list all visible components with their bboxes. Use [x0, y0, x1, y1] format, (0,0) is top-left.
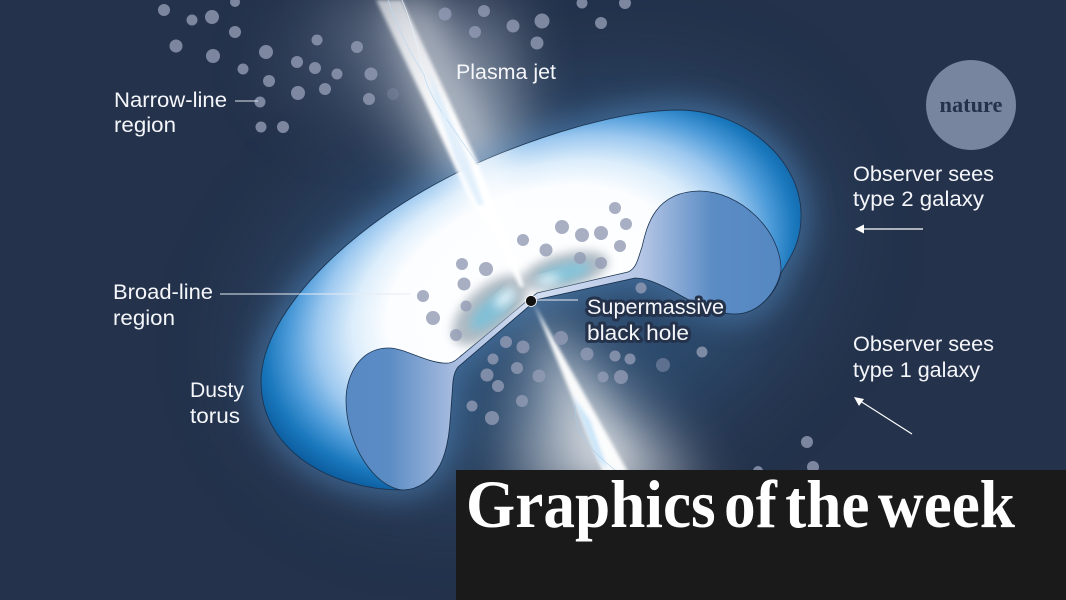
plasma jet: upper beam	[376, 0, 524, 287]
label: supermassive black hole: black hole	[587, 322, 689, 345]
label: observer sees type 1 galaxy: Observer sees	[853, 333, 994, 356]
label: observer sees type 2 galaxy: type 2 galaxy	[853, 188, 985, 211]
arrow: type 1 observer	[854, 397, 912, 434]
accretion disc	[447, 246, 612, 351]
glow: wide background haze	[204, 0, 876, 566]
jet light over torus	[436, 142, 529, 194]
label: broad-line region	[113, 281, 410, 330]
logo: nature: nature	[940, 92, 1003, 117]
glow: lower jet cone	[520, 300, 700, 495]
label: observer sees type 1 galaxy: type 1 galaxy	[853, 359, 981, 382]
label: observer sees type 2 galaxy	[853, 163, 994, 211]
dusty torus body	[261, 110, 801, 490]
torus inner cross-section faces	[346, 191, 781, 490]
label: supermassive black hole: Supermassive	[587, 296, 724, 319]
label: dusty torus: Dusty	[190, 379, 244, 402]
label: broad-line region: region	[113, 307, 175, 330]
label: narrow-line region: region	[114, 114, 176, 137]
logo: nature	[926, 60, 1016, 150]
label: plasma jet: Plasma jet	[456, 61, 556, 84]
label: broad-line region: Broad-line	[113, 281, 213, 304]
label: narrow-line region	[114, 89, 258, 137]
label: dusty torus	[190, 379, 244, 428]
label: narrow-line region: Narrow-line	[114, 89, 227, 112]
arrow: type 2 observer	[855, 224, 923, 234]
label: observer sees type 1 galaxy	[853, 333, 994, 382]
title banner	[456, 466, 1066, 600]
gas clouds: narrow-line and broad-line regions	[158, 0, 819, 476]
label: supermassive black hole	[587, 296, 724, 345]
glow: upper jet cone	[320, 0, 522, 285]
title banner: Graphics of the week	[466, 466, 1015, 542]
supermassive black hole marker	[526, 296, 578, 306]
label: observer sees type 2 galaxy: Observer sees	[853, 163, 994, 186]
torus halo	[261, 110, 801, 490]
label: dusty torus: torus	[190, 405, 240, 428]
plasma jet: lower beam	[533, 302, 628, 472]
